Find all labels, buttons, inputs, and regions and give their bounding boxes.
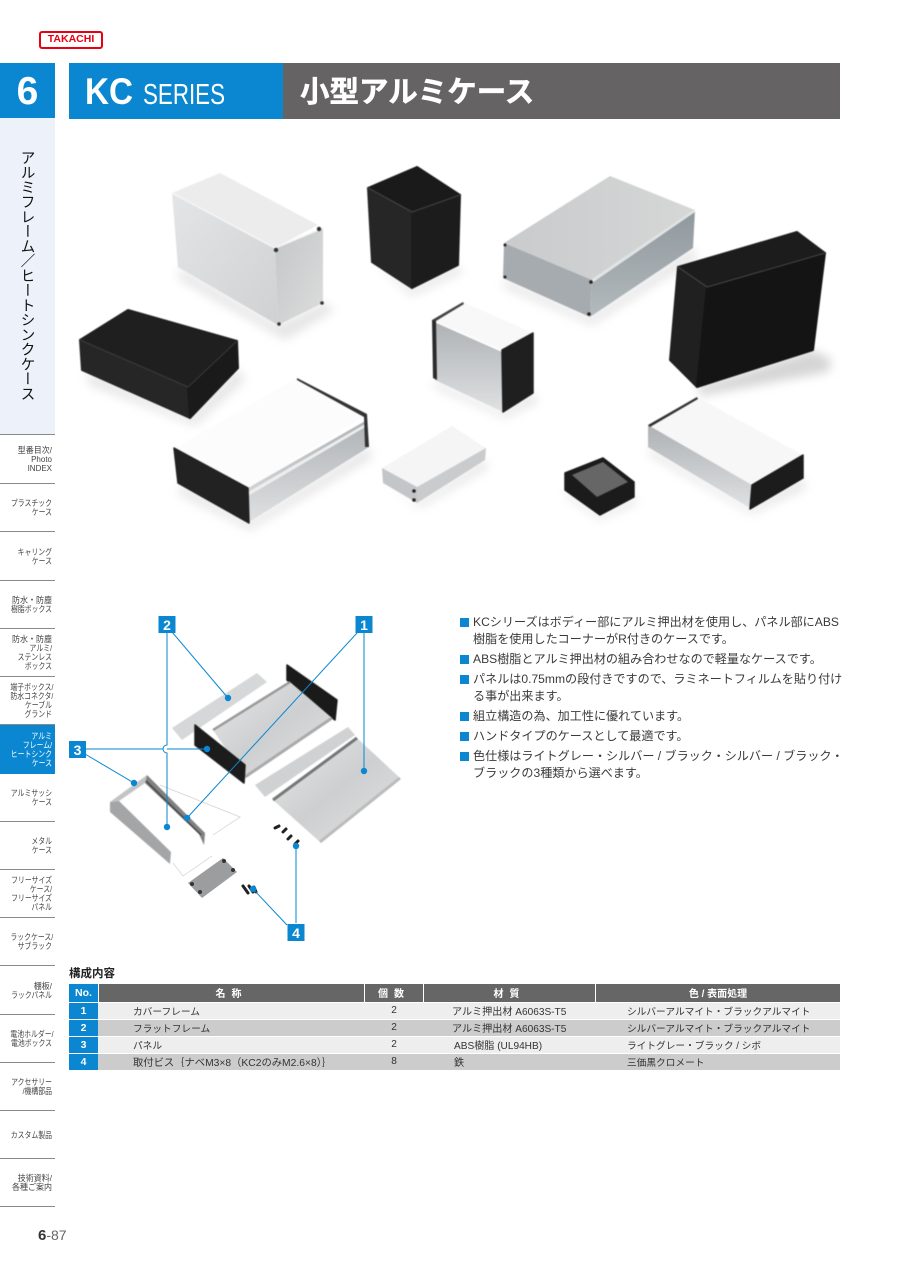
components table: 2 [391, 1022, 397, 1033]
sidebar navigation: ケース/ [30, 884, 52, 894]
sidebar navigation: ステンレス [18, 652, 52, 662]
sidebar navigation: ケース [32, 507, 52, 517]
case: sloped black [670, 232, 832, 396]
components table: 色 / 表面処理 [689, 989, 747, 1000]
feature list: 色仕様はライトグレー・シルバー / ブラック・シルバー / ブラック・ [473, 748, 843, 762]
components table: 三価黒クロメート [627, 1058, 704, 1069]
components table: 鉄 [454, 1058, 464, 1069]
components table: 1 [81, 1004, 86, 1016]
badge 2: 2 [163, 617, 171, 633]
badge 4 [288, 924, 304, 941]
components table: 2 [391, 1005, 397, 1016]
case: large silver with black panels [174, 378, 372, 530]
chapter number tab: 6 [17, 70, 38, 113]
components table: パネル [133, 1040, 162, 1052]
sidebar navigation: アルミサッシ [11, 788, 52, 798]
badge 4: 4 [292, 925, 300, 941]
sidebar navigation: キャリング [18, 547, 52, 557]
components table: シルバーアルマイト・ブラックアルマイト [627, 1006, 810, 1018]
sidebar navigation [0, 445, 55, 1207]
components table: ライトグレー・ブラック / シボ [627, 1040, 761, 1052]
chapter number tab [0, 63, 55, 118]
logo: TAKACHI [39, 31, 103, 48]
table heading: 構成内容 [69, 968, 115, 980]
leader dots [131, 695, 367, 892]
vertical category title: アルミフレーム／ヒートシンクケース [18, 150, 34, 401]
logo: TAKACHI: TAKACHI [48, 33, 94, 45]
sidebar navigation: メタル [31, 836, 52, 846]
sidebar navigation: プラスチック [11, 498, 52, 508]
sidebar navigation: INDEX [28, 463, 52, 473]
components table: 8 [391, 1056, 397, 1067]
sidebar category panel [0, 118, 55, 435]
case: wide silver [503, 176, 697, 325]
part: flat cover [255, 727, 400, 842]
feature list: KCシリーズはボディー部にアルミ押出材を使用し、パネル部にABS [473, 614, 839, 628]
leader lines [85, 632, 364, 925]
case: low black [80, 310, 245, 426]
feature list: ハンドタイプのケースとして最適です。 [473, 728, 689, 742]
components table: ABS樹脂 (UL94HB) [454, 1041, 542, 1052]
feature list [460, 614, 843, 780]
sidebar navigation: サブラック [18, 941, 52, 951]
part: laminate sheets [160, 785, 240, 876]
sidebar navigation: 端子ボックス/ [10, 682, 53, 692]
components table: 2 [391, 1039, 397, 1050]
sidebar navigation: 各種ご案内 [12, 1182, 52, 1192]
sidebar navigation: ケース [32, 758, 52, 768]
page number: 6-87 [38, 1227, 67, 1244]
feature list: ブラックの3種類から選べます。 [473, 766, 648, 780]
sidebar navigation: ラックパネル [11, 990, 52, 1000]
product title [283, 63, 840, 119]
exploded parts diagram [69, 616, 401, 941]
sidebar navigation: 電池ボックス [11, 1038, 52, 1048]
components table: シルバーアルマイト・ブラックアルマイト [627, 1024, 810, 1034]
sidebar navigation: Photo [31, 454, 52, 464]
components table: 材質 [494, 989, 526, 1000]
components table: カバーフレーム [133, 1006, 200, 1018]
series label: KC [85, 71, 133, 112]
components table: 名称 [216, 989, 248, 1000]
case: small silver [382, 426, 488, 508]
feature list: パネルは0.75mmの段付きですので、ラミネートフィルムを貼り付け [473, 672, 842, 686]
sidebar navigation: フリーサイズ [11, 875, 52, 885]
sidebar navigation: フレーム/ [23, 740, 52, 750]
badge 3 [69, 741, 86, 758]
case: tall black [368, 167, 463, 296]
series label: SERIES [143, 79, 225, 111]
components table: 4 [81, 1056, 86, 1068]
components table: フラットフレーム [133, 1024, 210, 1034]
sidebar navigation: フリーサイズ [11, 893, 52, 903]
badge 3: 3 [74, 742, 82, 758]
sidebar navigation: /機構部品 [23, 1086, 52, 1096]
sidebar navigation: ケーブル [25, 700, 52, 710]
part: main body with black panels [195, 665, 337, 783]
components table: 3 [81, 1038, 86, 1050]
case: large light grey [172, 173, 335, 340]
sidebar navigation: アルミ/ [30, 643, 52, 653]
case: centre silver with black panels [432, 302, 538, 418]
part: cover frame [110, 775, 205, 864]
case: slim silver with black panel [648, 397, 806, 514]
part: flat frame (top panel) [172, 673, 267, 740]
components table: 取付ビス｛ナベM3×8（KC2のみM2.6×8）｝ [133, 1058, 332, 1069]
sidebar navigation: ボックス [25, 661, 52, 671]
sidebar navigation: アルミ [31, 730, 52, 740]
sidebar navigation: 樹脂ボックス [11, 604, 52, 614]
sidebar navigation: 棚板/ [34, 981, 52, 991]
part: screws [243, 826, 298, 893]
sidebar navigation: 防水・防塵 [12, 634, 52, 644]
components table: アルミ押出材 A6063S-T5 [452, 1024, 566, 1035]
sidebar navigation: アクセサリー [11, 1077, 52, 1087]
sidebar navigation: 防水コネクタ/ [10, 691, 53, 701]
components table: No. [75, 987, 92, 999]
components table: アルミ押出材 A6063S-T5 [452, 1007, 566, 1018]
feature list: 樹脂を使用したコーナーがR付きのケースです。 [473, 632, 734, 646]
feature list: 組立構造の為、加工性に優れています。 [473, 708, 689, 722]
case: small black square [565, 458, 638, 520]
series label [69, 63, 283, 119]
sidebar navigation: カスタム製品 [11, 1130, 52, 1140]
sidebar navigation: ラックケース/ [10, 932, 53, 942]
sidebar navigation: 電池ホルダー/ [10, 1029, 54, 1039]
sidebar navigation: 型番目次/ [18, 445, 52, 455]
sidebar navigation: ケース [32, 845, 52, 855]
sidebar navigation: 防水・防塵 [12, 595, 52, 605]
feature list: る事が出来ます。 [473, 688, 569, 702]
part: end panel [188, 858, 237, 898]
sidebar navigation: パネル [31, 902, 52, 912]
badge 2 [158, 616, 176, 633]
badge 1 [356, 616, 372, 633]
sidebar navigation: ケース [32, 796, 52, 806]
title banner [69, 63, 840, 119]
components table: 個数 [378, 989, 410, 1000]
product photo group [78, 165, 834, 530]
badge 1: 1 [360, 617, 368, 633]
components table: 2 [81, 1022, 86, 1034]
sidebar navigation: ケース [32, 556, 52, 566]
feature list: ABS樹脂とアルミ押出材の組み合わせなので軽量なケースです。 [473, 652, 822, 666]
sidebar navigation: 技術資料/ [18, 1173, 52, 1183]
sidebar navigation: グランド [24, 709, 52, 719]
sidebar navigation: ヒートシンク [11, 748, 52, 758]
product title: 小型アルミケース [300, 76, 534, 109]
